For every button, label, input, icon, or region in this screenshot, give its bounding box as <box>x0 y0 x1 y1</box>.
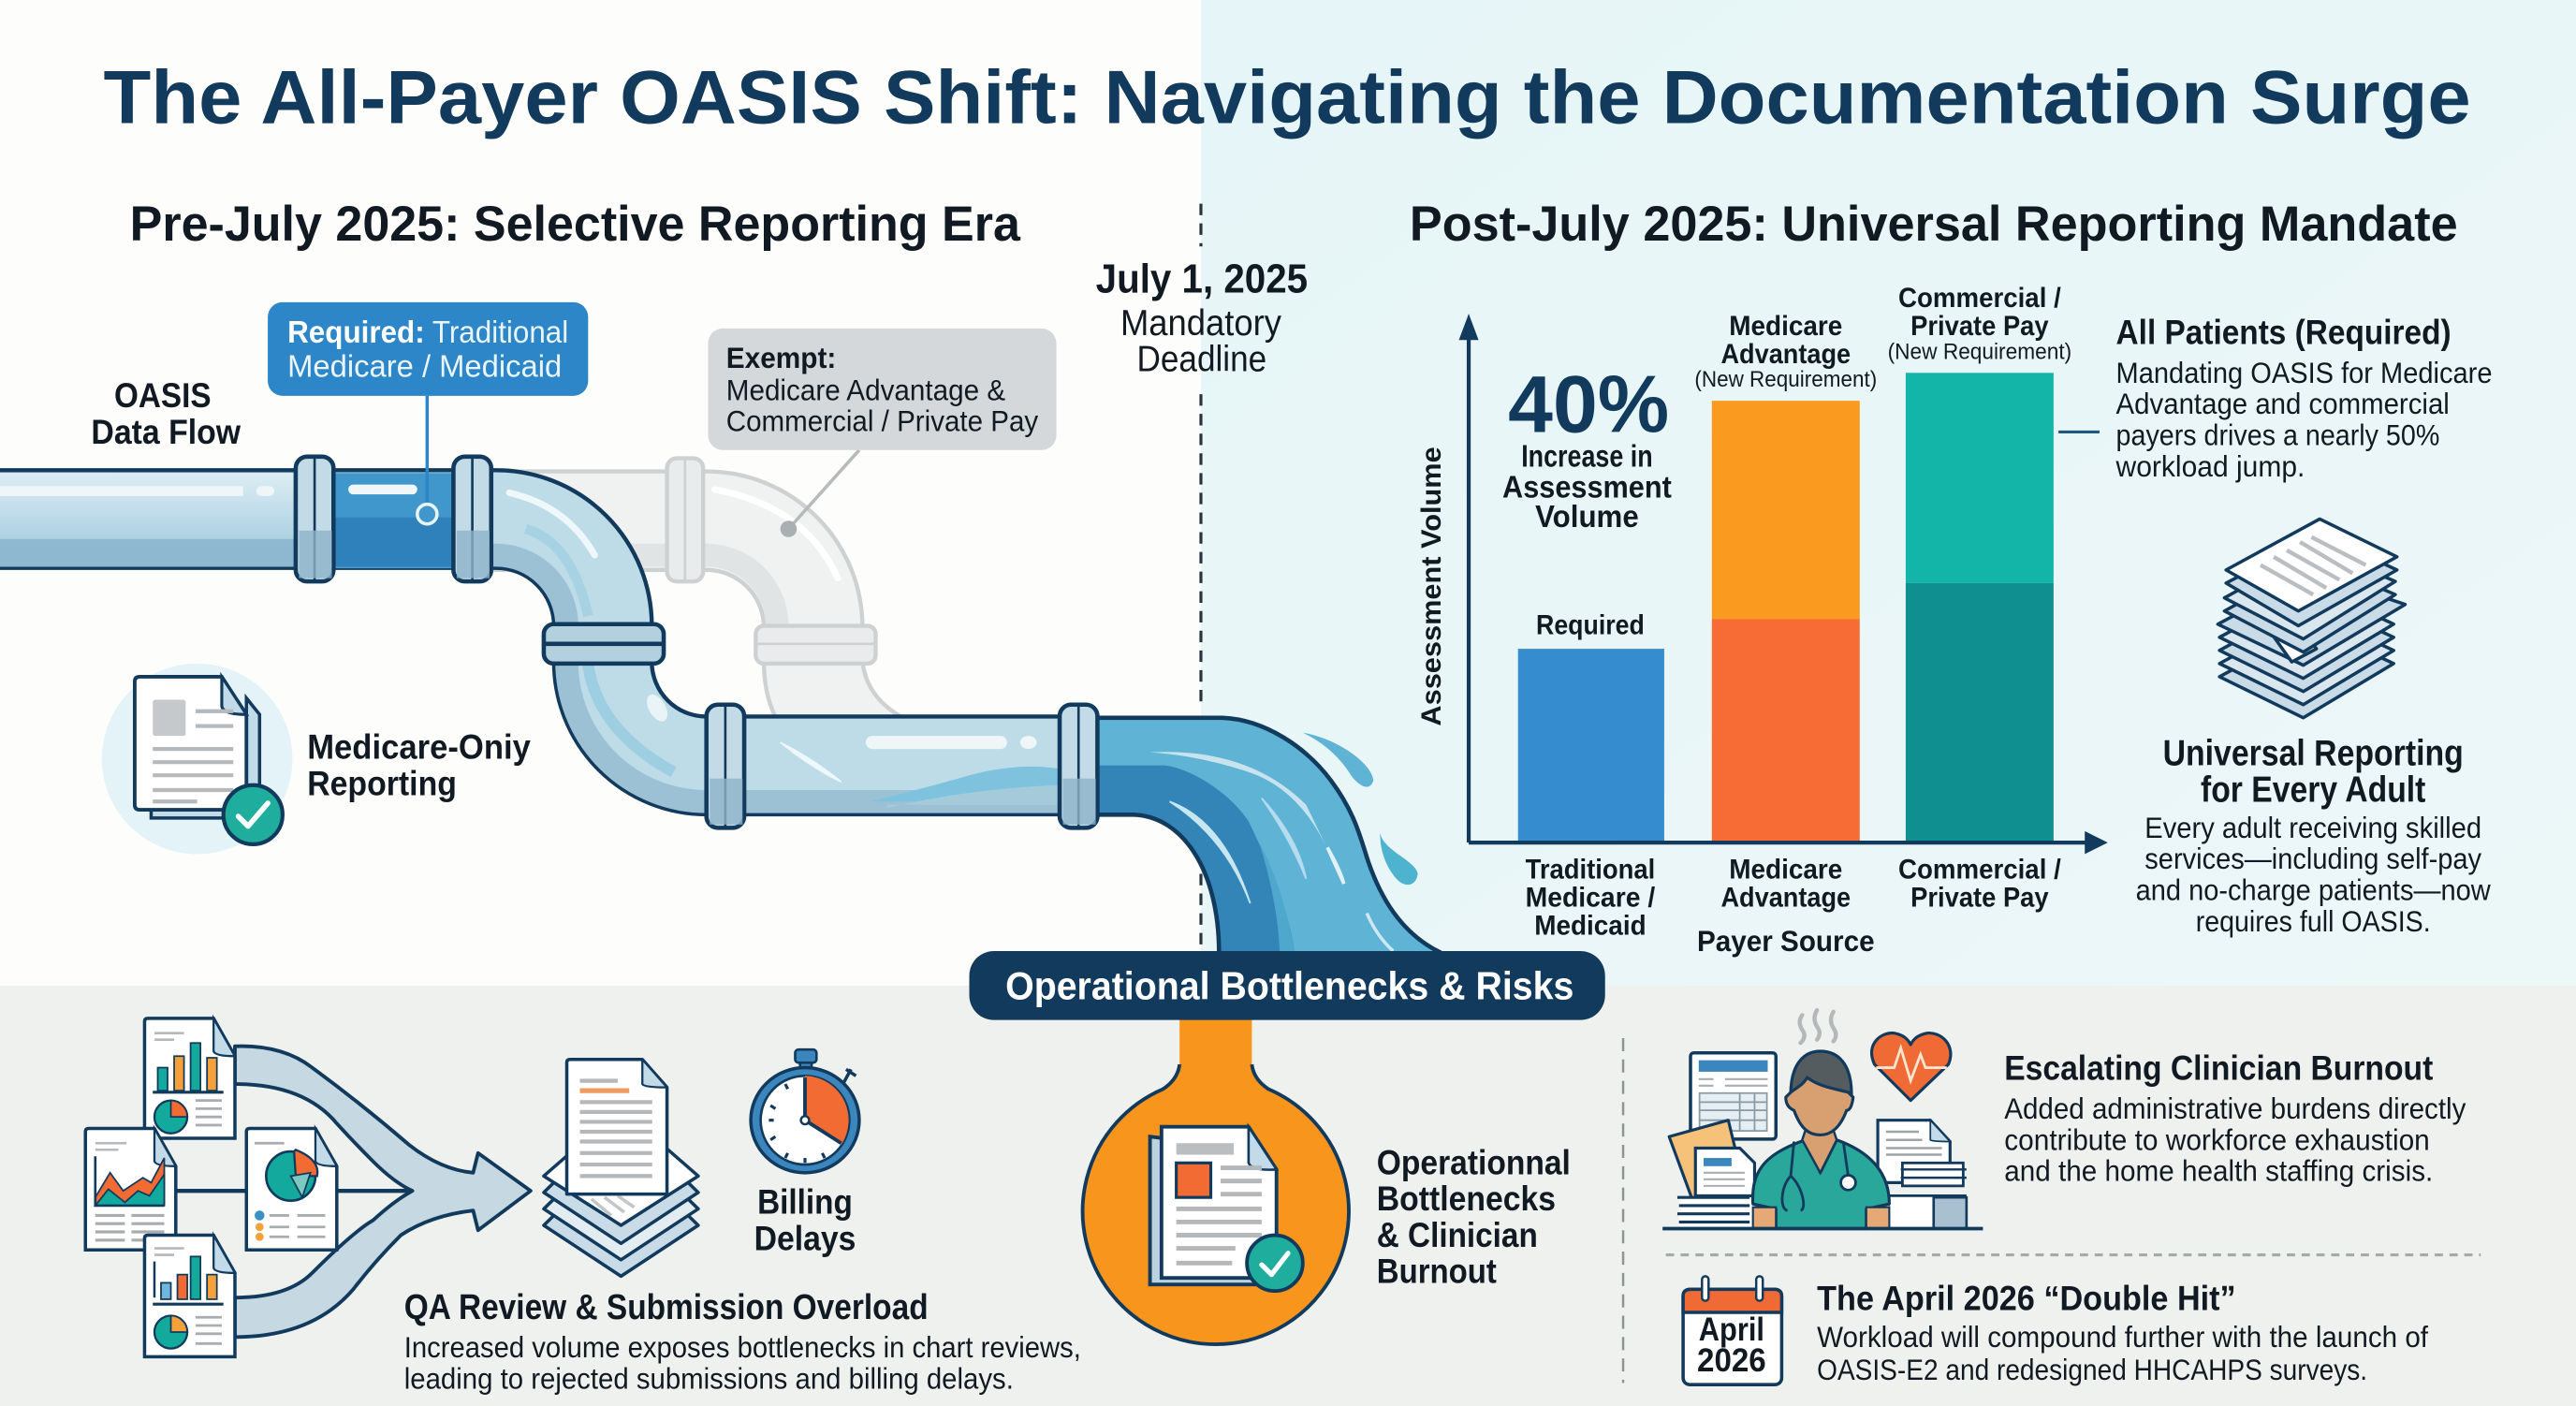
label: billing delays: Delays <box>754 1219 856 1257</box>
callout: exempt: Commercial / Private Pay <box>726 404 1038 438</box>
text block: universal reporting: requires full OASIS. <box>2196 904 2431 938</box>
icon: burned-out clinician at desk <box>1662 1010 1983 1228</box>
label: OASIS data flow: Data Flow <box>91 413 241 451</box>
icon: orange bulb with document <box>1083 1015 1349 1344</box>
callout: required: Medicare / Medicaid <box>287 350 562 385</box>
heading: pre-July 2025: Pre-July 2025: Selective Reporting Era <box>130 197 1021 252</box>
chart axes <box>1459 314 2108 854</box>
text block: all patients required: payers drives a nearly 50% <box>2116 418 2439 452</box>
heading: post-July 2025: Post-July 2025: Universal Reporting Mandate <box>1410 197 2458 252</box>
orange folder <box>1669 1120 1741 1199</box>
label: operational bottlenecks and burnout: Burnout <box>1377 1252 1497 1290</box>
text block: April 2026 double hit <box>1817 1279 2428 1386</box>
label: Medicare-only reporting <box>307 728 531 802</box>
pipe: main flow <box>0 457 1097 827</box>
deadline divider and label: July 1, 2025 <box>1096 256 1308 301</box>
icon: Medicare-only document <box>102 664 292 854</box>
y axis label: Assessment Volume <box>1416 447 1447 726</box>
text block: April 2026 double hit: The April 2026 “Double Hit” <box>1817 1279 2236 1317</box>
book stack left <box>1679 1197 1754 1227</box>
callout: exempt: Medicare Advantage & <box>726 373 1005 406</box>
icon: pie chart document <box>246 1128 337 1250</box>
bar top labels: (New Requirement) <box>1888 340 2071 364</box>
pipe: water spilling out of the elbow <box>1060 705 1441 953</box>
bar: traditional medicare <box>1518 649 1664 842</box>
x axis category labels: Medicare / <box>1526 883 1655 914</box>
label: billing delays: Billing <box>757 1183 853 1222</box>
bar chart: assessment volume by payer <box>1416 283 2108 958</box>
body in scrubs <box>1753 1130 1889 1228</box>
deadline divider and label: Mandatory <box>1120 303 1282 344</box>
x axis category labels: Medicaid <box>1534 910 1647 941</box>
monitor chart <box>1690 1053 1776 1139</box>
text block: all patients required: workload jump. <box>2115 449 2305 483</box>
right paper <box>1878 1120 1950 1182</box>
text block: clinician burnout: Added administrative burdens directly <box>2004 1091 2466 1125</box>
banner: operational bottlenecks: Operational Bottlenecks & Risks <box>1005 964 1573 1008</box>
x axis category labels: Commercial / <box>1898 855 2061 886</box>
label: Medicare-only reporting: Reporting <box>307 764 457 802</box>
text block: universal reporting: Every adult receiving skilled <box>2144 811 2481 844</box>
text block: universal reporting <box>2136 734 2491 938</box>
small paper <box>1695 1149 1754 1195</box>
icon: chart document bottom <box>144 1236 235 1356</box>
deadline divider and label <box>1096 204 1308 953</box>
bar top labels: Commercial / <box>1898 283 2061 314</box>
callout: required: Required: Traditional <box>287 315 568 350</box>
text block: all patients required <box>2058 314 2492 483</box>
text block: all patients required: Mandating OASIS for Medicare <box>2116 356 2492 389</box>
icon: calendar April 2026: April <box>1699 1311 1764 1348</box>
icon: area chart document <box>85 1128 176 1250</box>
bar top labels: Required <box>1536 609 1645 640</box>
files and box right <box>1889 1163 1967 1228</box>
text block: April 2026 double hit: Workload will compound further with the launch of <box>1817 1320 2428 1354</box>
icon: calendar April 2026 <box>1683 1276 1781 1384</box>
text block: QA review overload: QA Review & Submission Overload <box>404 1287 929 1326</box>
text block: universal reporting: Universal Reporting <box>2163 734 2464 774</box>
bar top labels: Advantage <box>1720 339 1851 370</box>
steam <box>1800 1010 1836 1043</box>
icon: chart document top <box>144 1018 235 1138</box>
label: billing delays <box>754 1183 856 1257</box>
label: Medicare-only reporting: Medicare-Oniy <box>307 728 531 767</box>
callout: exempt <box>708 329 1057 537</box>
bar top labels: Private Pay <box>1910 311 2049 342</box>
label: OASIS data flow: OASIS <box>114 376 212 415</box>
label: operational bottlenecks and burnout: Operationnal <box>1377 1144 1571 1182</box>
stat: 40 percent increase <box>1502 359 1672 535</box>
x axis category labels: Advantage <box>1720 883 1851 914</box>
text block: clinician burnout: and the home health staffing crisis. <box>2004 1154 2433 1188</box>
x axis category labels: Medicare <box>1729 855 1842 886</box>
label: operational bottlenecks and burnout: Bottlenecks <box>1377 1179 1556 1218</box>
stat: 40 percent increase: Assessment <box>1502 471 1672 505</box>
text block: QA review overload <box>404 1287 1081 1396</box>
text block: April 2026 double hit: OASIS-E2 and redesigned HHCAHPS surveys. <box>1817 1353 2367 1386</box>
stat: 40 percent increase: Volume <box>1535 500 1639 535</box>
text block: all patients required: Advantage and commercial <box>2116 387 2450 420</box>
x axis category labels <box>1526 855 2061 941</box>
icon: stopwatch <box>751 1049 859 1173</box>
callout: required <box>268 302 588 524</box>
stat: 40 percent increase: 40% <box>1508 359 1669 449</box>
text block: clinician burnout <box>2004 1049 2466 1188</box>
label: operational bottlenecks and burnout: & Clinician <box>1377 1216 1538 1254</box>
label: OASIS data flow <box>91 376 241 451</box>
x axis label: Payer Source <box>1697 924 1875 958</box>
desk <box>1662 1227 1983 1230</box>
head <box>1786 1051 1853 1135</box>
text block: QA review overload: leading to rejected submissions and billing delays. <box>404 1362 1014 1396</box>
icon: paper stack <box>2217 519 2405 718</box>
text block: all patients required: All Patients (Required) <box>2116 314 2452 352</box>
stat: 40 percent increase: Increase in <box>1521 439 1653 474</box>
heart <box>1872 1033 1951 1101</box>
pipe: ghost exempt route <box>493 459 914 723</box>
bar top labels: Medicare <box>1729 311 1842 342</box>
icon: review document on stack <box>544 1060 698 1276</box>
icon: calendar April 2026: 2026 <box>1697 1342 1766 1379</box>
text block: clinician burnout: contribute to workforce exhaustion <box>2004 1122 2430 1156</box>
text block: clinician burnout: Escalating Clinician Burnout <box>2004 1049 2433 1088</box>
deadline divider and label: Deadline <box>1137 340 1266 380</box>
x axis category labels: Traditional <box>1526 855 1655 886</box>
bar top labels <box>1536 283 2071 640</box>
text block: universal reporting: and no-charge patients—now <box>2136 873 2491 907</box>
text block: QA review overload: Increased volume exposes bottlenecks in chart reviews, <box>404 1330 1081 1364</box>
bar: commercial private pay <box>1906 373 2054 842</box>
bar: medicare advantage <box>1712 401 1860 842</box>
callout: exempt: Exempt: <box>726 341 836 374</box>
title: The All-Payer OASIS Shift: Navigating the Documentation Surge <box>104 56 2471 140</box>
x axis category labels: Private Pay <box>1910 883 2049 914</box>
text block: universal reporting: services—including self-pay <box>2144 842 2481 875</box>
icon: merging arrows <box>176 1047 531 1337</box>
bar top labels: (New Requirement) <box>1694 368 1877 392</box>
banner: operational bottlenecks <box>970 951 1605 1020</box>
text block: universal reporting: for Every Adult <box>2201 769 2426 810</box>
label: operational bottlenecks and burnout <box>1377 1144 1571 1290</box>
